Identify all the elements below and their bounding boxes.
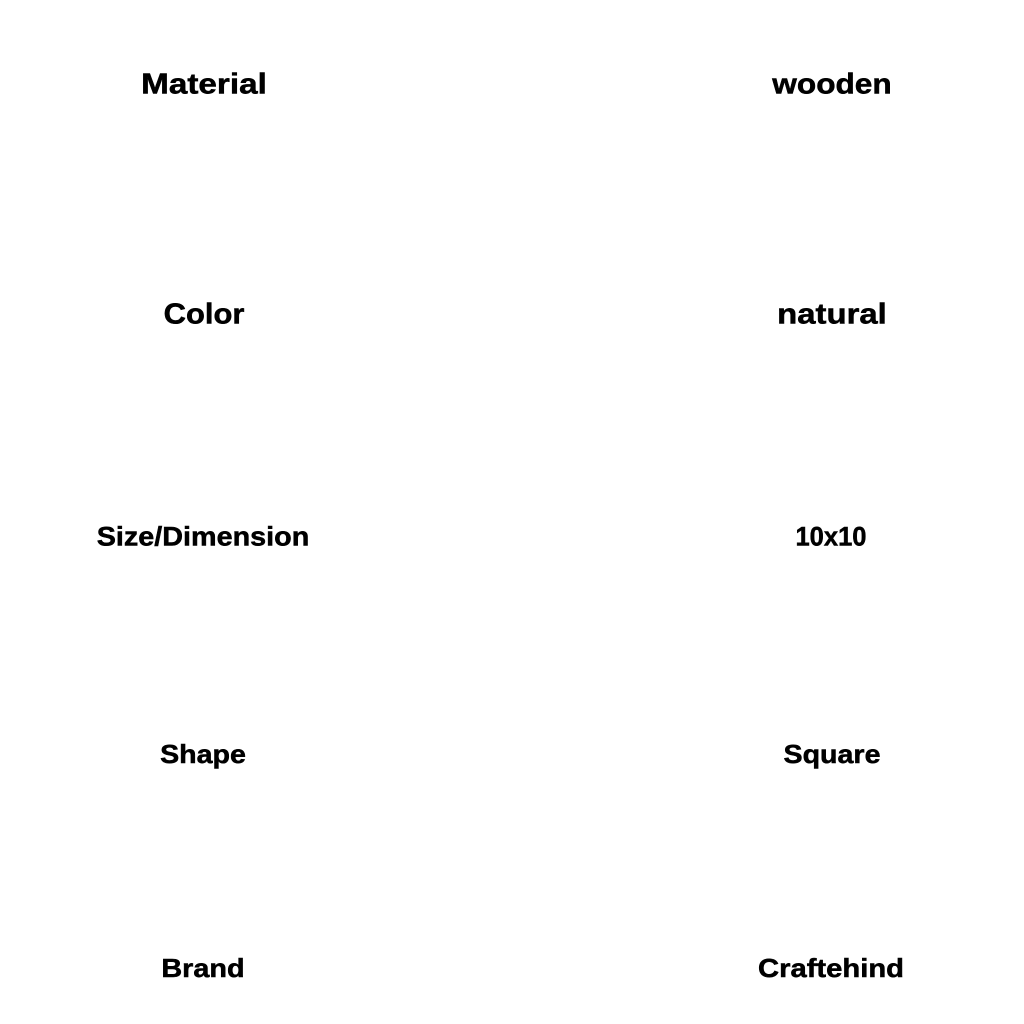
value: 10x10: 10x10 bbox=[795, 522, 867, 552]
value: Craftehind: Craftehind bbox=[758, 953, 904, 983]
label: Brand: Brand bbox=[161, 953, 245, 983]
label: Size/Dimension: Size/Dimension bbox=[97, 522, 309, 552]
label: Material: Material bbox=[141, 68, 266, 100]
value: wooden: wooden bbox=[772, 68, 891, 100]
value: Square: Square bbox=[783, 739, 880, 769]
label: Shape: Shape bbox=[160, 739, 246, 769]
label: Color: Color bbox=[164, 298, 244, 330]
value: natural: natural bbox=[777, 298, 887, 330]
